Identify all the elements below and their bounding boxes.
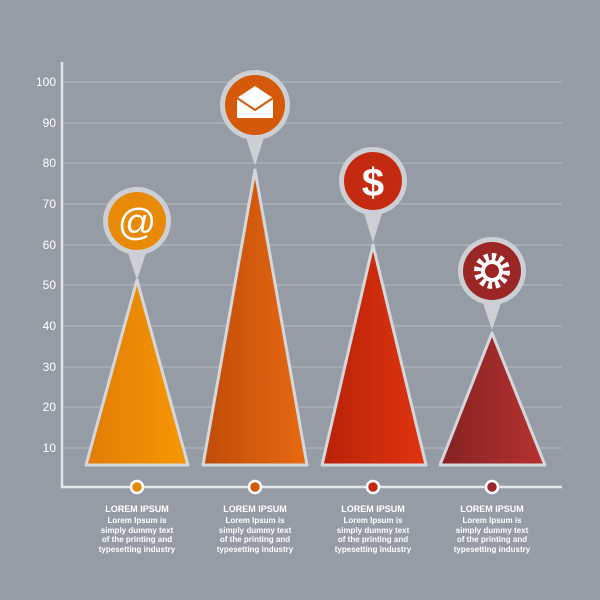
captions: simply dummy text <box>456 526 529 535</box>
captions: of the printing and <box>220 535 290 544</box>
captions: typesetting industry <box>217 545 294 554</box>
captions: LOREM IPSUM <box>223 504 287 514</box>
captions: LOREM IPSUM <box>460 504 524 514</box>
icon: at sign <box>103 187 171 280</box>
axes <box>61 62 562 488</box>
icon: at sign: @ <box>118 202 156 244</box>
captions: LOREM IPSUM <box>341 504 405 514</box>
captions: Lorem Ipsum is <box>225 516 285 525</box>
icon: gear <box>458 237 526 330</box>
y axis labels: 50 <box>43 278 56 292</box>
captions: of the printing and <box>457 535 527 544</box>
icon: dollar <box>339 147 407 243</box>
captions: Lorem Ipsum is <box>107 516 167 525</box>
y axis labels: 10 <box>43 441 56 455</box>
icon: envelope <box>220 70 290 166</box>
icon: dollar: $ <box>362 161 384 205</box>
captions: simply dummy text <box>101 526 174 535</box>
captions: of the printing and <box>102 535 172 544</box>
bar 1 <box>86 187 188 465</box>
y axis labels: 30 <box>43 360 56 374</box>
captions: Lorem Ipsum is <box>462 516 522 525</box>
y axis labels <box>36 75 56 455</box>
captions: Lorem Ipsum is <box>343 516 403 525</box>
axis markers <box>131 481 498 493</box>
captions: simply dummy text <box>219 526 292 535</box>
bar 2 <box>203 70 307 465</box>
captions: LOREM IPSUM <box>105 504 169 514</box>
captions: typesetting industry <box>335 545 412 554</box>
bar 3 <box>322 147 426 465</box>
y axis labels: 90 <box>43 116 56 130</box>
captions: simply dummy text <box>337 526 410 535</box>
y axis labels: 100 <box>36 75 56 89</box>
captions <box>99 504 531 554</box>
bar 4 <box>440 237 545 465</box>
y axis labels: 70 <box>43 197 56 211</box>
y axis labels: 40 <box>43 319 56 333</box>
y axis labels: 80 <box>43 156 56 170</box>
captions: typesetting industry <box>99 545 176 554</box>
captions: of the printing and <box>338 535 408 544</box>
y axis labels: 60 <box>43 238 56 252</box>
y axis labels: 20 <box>43 400 56 414</box>
captions: typesetting industry <box>454 545 531 554</box>
